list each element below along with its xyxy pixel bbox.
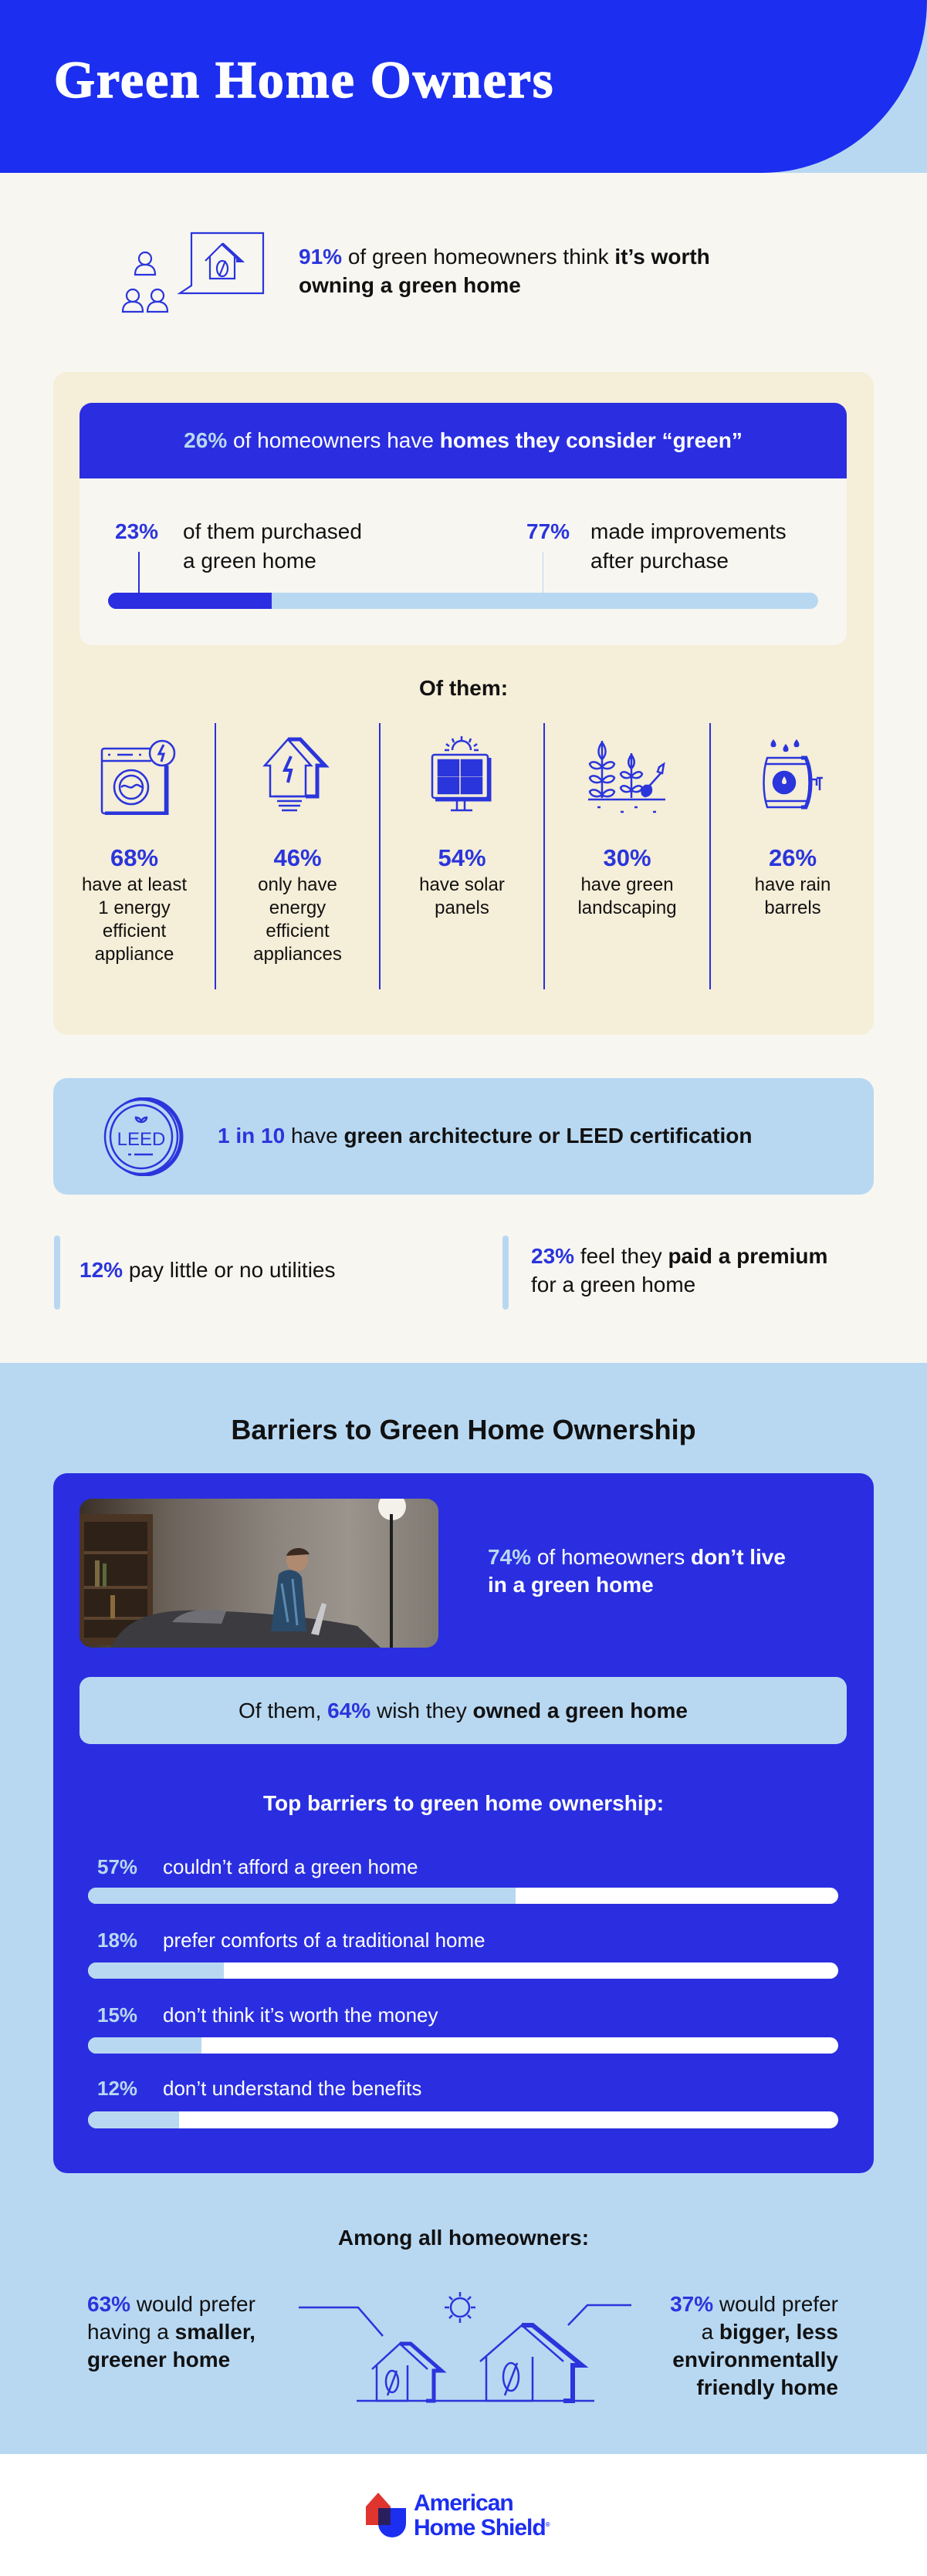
bar chart: barriers: 12% bbox=[97, 2077, 137, 2100]
cream background bbox=[0, 0, 927, 1363]
text: for a green home bbox=[531, 1273, 695, 1296]
text: 63% bbox=[87, 2292, 255, 2371]
icon: landscaping bbox=[588, 741, 665, 813]
text: 1 in 10: 1 in 10 have green architecture or LEED certification bbox=[218, 1124, 752, 1148]
card header: 26% of homeowners have homes they consider “green” bbox=[184, 428, 743, 452]
text: 30% bbox=[603, 844, 651, 871]
bar chart: barriers: prefer comforts of a traditional home bbox=[163, 1929, 485, 1952]
text: 63%: having a smaller, bbox=[87, 2320, 255, 2344]
card: 26%: 77% bbox=[526, 519, 570, 543]
card: 26%: a green home bbox=[183, 549, 316, 573]
text: 63%: greener home bbox=[87, 2348, 230, 2371]
icon: two houses with sun bbox=[299, 2292, 631, 2403]
bar chart: barriers: 15% bbox=[97, 2003, 137, 2027]
text: 37%: a bigger, less bbox=[702, 2320, 838, 2344]
heading: among all homeowners: Among all homeowners: bbox=[338, 2226, 589, 2250]
icon: people with speech bubble house bbox=[122, 232, 264, 313]
panel: green homes (beige) bbox=[53, 372, 874, 1035]
icon: LEED seal: LEED bbox=[117, 1129, 165, 1150]
heading: barriers: Barriers to Green Home Ownership bbox=[231, 1414, 696, 1445]
text: barrels bbox=[764, 898, 821, 918]
text: 37%: friendly home bbox=[696, 2375, 838, 2399]
text: 23% feel they paid a premium bbox=[531, 1244, 827, 1268]
text: 74%: in a green home bbox=[488, 1573, 654, 1597]
dividers bbox=[215, 723, 216, 989]
text: have green bbox=[580, 874, 674, 895]
bar chart: barriers bbox=[88, 1855, 838, 2128]
icon: washing machine bbox=[100, 739, 176, 815]
card: 26%: of them purchased bbox=[183, 519, 362, 543]
text: 54% bbox=[438, 844, 486, 871]
text: 74% bbox=[488, 1545, 786, 1597]
text: 91%: owning a green home bbox=[299, 273, 521, 297]
stats row: 68% bbox=[110, 844, 158, 871]
light blue corner bbox=[695, 0, 927, 173]
card header bbox=[80, 403, 847, 478]
text: 37% bbox=[670, 2292, 838, 2399]
stat: 12% utilities bbox=[54, 1236, 60, 1310]
stat 77% bbox=[526, 519, 787, 573]
logo: American Home Shield: Home Shield® bbox=[414, 2515, 550, 2541]
icon: solar panel bbox=[431, 736, 491, 812]
bar chart: barriers: 18% bbox=[97, 1929, 137, 1952]
stats row bbox=[82, 844, 187, 965]
text: 37%: 37% would prefer bbox=[670, 2292, 838, 2316]
text: have rain bbox=[755, 874, 831, 895]
icon: rain barrel bbox=[763, 739, 823, 809]
stats row: 1 energy bbox=[98, 898, 171, 918]
section: barriers background bbox=[0, 1363, 927, 2454]
text: 74%: 74% of homeowners don’t live bbox=[488, 1545, 786, 1569]
text: 46% bbox=[273, 844, 322, 871]
text: efficient bbox=[266, 921, 330, 941]
text: 91%: 91% of green homeowners think it’s worth bbox=[299, 245, 710, 269]
header bbox=[0, 0, 927, 173]
text: 91% bbox=[299, 245, 710, 297]
card: 26% bbox=[80, 403, 847, 645]
card: 26%: after purchase bbox=[590, 549, 729, 573]
icon: LEED seal bbox=[103, 1097, 184, 1176]
text: 12% pay little or no utilities bbox=[80, 1258, 336, 1282]
text: 37%: environmentally bbox=[672, 2348, 838, 2371]
stat 23% bbox=[115, 519, 362, 573]
bar chart: barriers: 57% bbox=[97, 1855, 137, 1878]
icon: bulb house bbox=[262, 738, 330, 812]
stats row: have at least bbox=[82, 874, 187, 895]
heading: top barriers: Top barriers to green home ownership: bbox=[263, 1791, 664, 1815]
text: appliances bbox=[253, 944, 342, 965]
text: have solar bbox=[419, 874, 505, 895]
text: panels bbox=[435, 898, 489, 918]
stat: 23% premium bbox=[502, 1236, 509, 1310]
heading: of them: Of them: bbox=[419, 676, 508, 700]
text: 63%: 63% would prefer bbox=[87, 2292, 255, 2316]
panel: barriers bbox=[53, 1473, 874, 2173]
photo: man on bed with laptop bbox=[80, 1499, 438, 1648]
stats row: efficient bbox=[103, 921, 166, 941]
bar chart: barriers: don’t understand the benefits bbox=[163, 2077, 421, 2100]
bar chart: barriers: don’t think it’s worth the money bbox=[163, 2003, 438, 2027]
text: only have bbox=[258, 874, 337, 895]
callout: 64%: Of them, 64% wish they owned a green home bbox=[239, 1699, 688, 1722]
card: 26%: 23% bbox=[115, 519, 158, 543]
logo: American Home Shield bbox=[366, 2490, 550, 2541]
progress bar bbox=[108, 593, 818, 609]
stats row: appliance bbox=[95, 944, 174, 965]
title: Green Home Owners bbox=[54, 50, 554, 109]
card: 26%: made improvements bbox=[590, 519, 787, 543]
logo: American Home Shield: American bbox=[414, 2490, 513, 2516]
callout: 64% bbox=[80, 1677, 847, 1744]
text: landscaping bbox=[577, 898, 677, 918]
text: 26% bbox=[769, 844, 817, 871]
bar chart: barriers: couldn’t afford a green home bbox=[163, 1855, 418, 1878]
text: energy bbox=[269, 898, 326, 918]
panel: LEED bbox=[53, 1078, 874, 1195]
